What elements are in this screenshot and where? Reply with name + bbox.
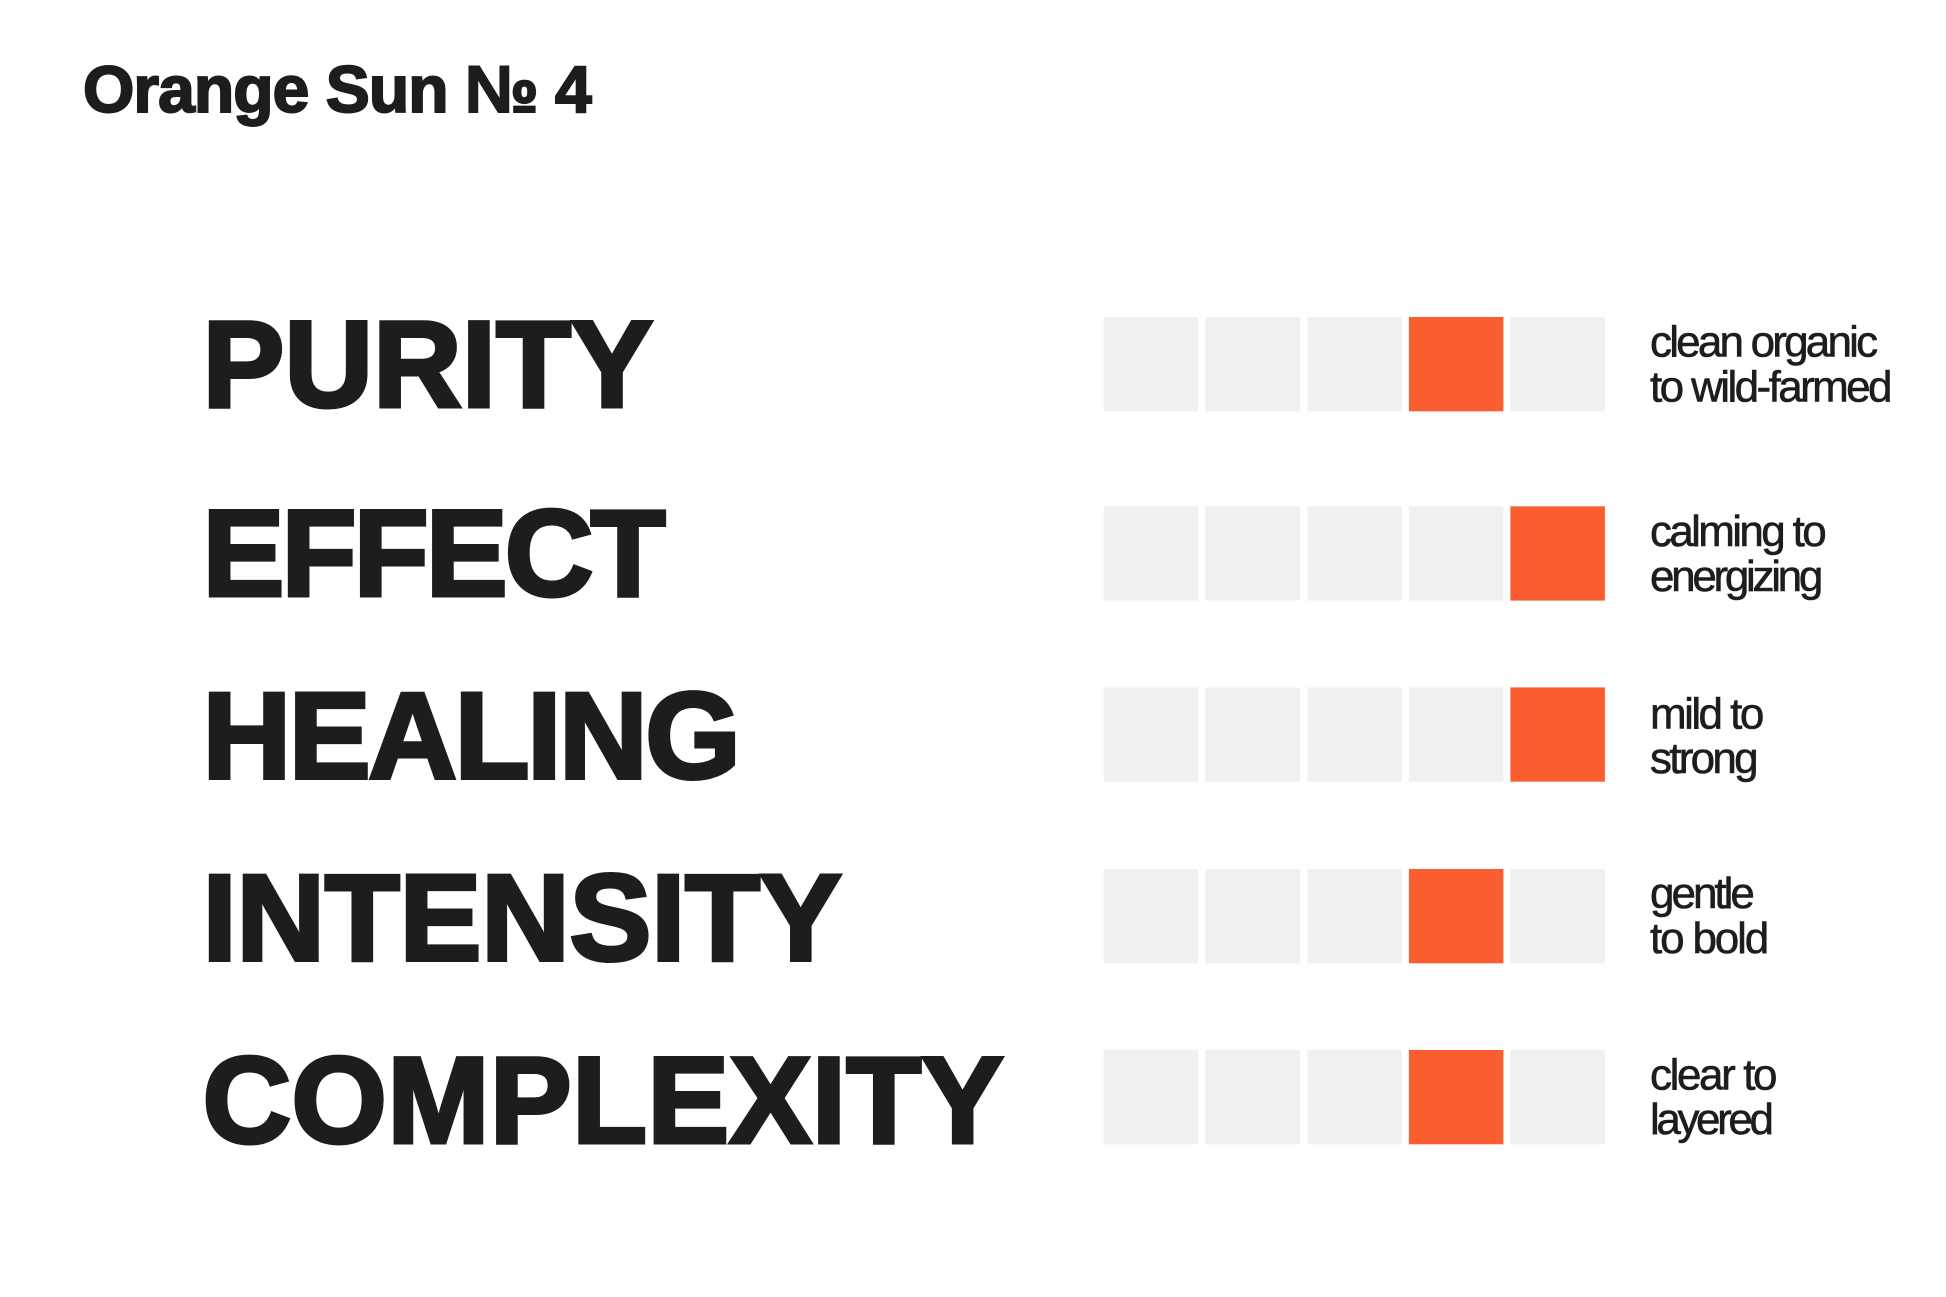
description: intensity: to bold [1650, 914, 1767, 963]
heading: effect: EFFECT [203, 484, 665, 622]
description: purity [1650, 318, 1890, 412]
scale: intensity, 4 of 5 [1104, 869, 1605, 963]
description: healing: strong [1650, 734, 1756, 783]
row: healing [203, 667, 1763, 804]
description: effect: calming to [1650, 507, 1825, 556]
title: Orange Sun № 4 [83, 52, 592, 126]
description: purity: to wild-farmed [1650, 363, 1890, 412]
heading: intensity: INTENSITY [203, 849, 841, 986]
description: complexity: clear to [1650, 1050, 1776, 1099]
heading: complexity: COMPLEXITY [203, 1031, 1004, 1168]
scale: purity, 4 of 5 [1104, 317, 1605, 411]
description: effect [1650, 507, 1825, 601]
description: intensity [1650, 869, 1767, 963]
description: complexity: layered [1650, 1095, 1771, 1144]
description: healing: mild to [1650, 689, 1763, 738]
description: effect: energizing [1650, 552, 1821, 601]
row: intensity [203, 849, 1767, 986]
row: complexity [203, 1031, 1776, 1168]
row: purity [203, 296, 1890, 432]
heading: purity: PURITY [203, 296, 653, 432]
scale: complexity, 4 of 5 [1104, 1050, 1605, 1144]
description: purity: clean organic [1650, 318, 1877, 367]
description: complexity [1650, 1050, 1776, 1144]
row: effect [203, 484, 1825, 622]
description: intensity: gentle [1650, 869, 1753, 918]
description: healing [1650, 689, 1763, 783]
scale: healing, 5 of 5 [1104, 687, 1605, 782]
scale: effect, 5 of 5 [1104, 506, 1605, 601]
heading: healing: HEALING [203, 667, 738, 804]
